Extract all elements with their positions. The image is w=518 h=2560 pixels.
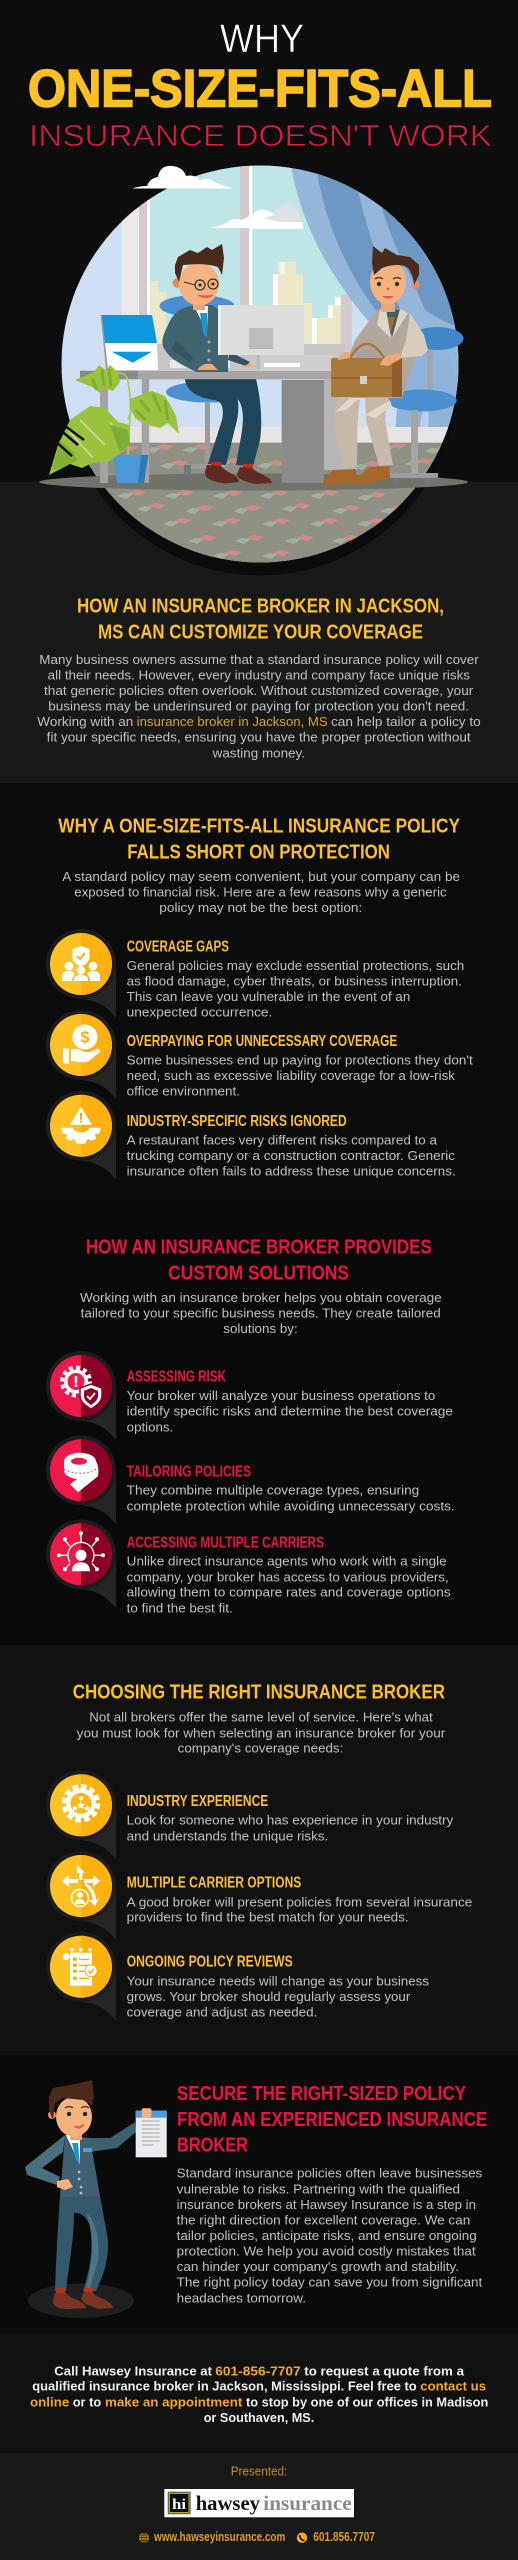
item: tailoring policies: TAILORING POLICIES (127, 1463, 251, 1480)
heading (177, 2082, 487, 2157)
call to action (30, 2363, 488, 2425)
intro paragraph: policy may not be the best option: (159, 900, 362, 915)
icon: gear with stars (46, 1770, 116, 1859)
icon: agent network (46, 1519, 116, 1608)
item: multiple carrier options: providers to find the best match for your needs. (127, 1910, 409, 1925)
call to action: online (30, 2394, 69, 2409)
intro paragraph (62, 869, 460, 915)
clouds in window (210, 216, 250, 228)
panel: secure the right-sized policy (25, 2080, 487, 2318)
item: coverage gaps: unexpected occurrence. (127, 1005, 272, 1020)
paragraph: tailor policies, anticipate risks, and ensure ongoing (177, 2228, 477, 2243)
intro paragraph (80, 1290, 442, 1336)
call to action: or Southaven, MS. (204, 2410, 314, 2425)
monitor (218, 305, 304, 370)
icon: direction arrows and person (46, 1851, 116, 1940)
title (28, 17, 492, 153)
carpet tiles (110, 443, 454, 559)
heading: HOW AN INSURANCE BROKER IN JACKSON, (77, 595, 444, 618)
presented label: Presented: (231, 2463, 287, 2478)
heading: FALLS SHORT ON PROTECTION (127, 840, 390, 863)
paragraph: headaches tomorrow. (177, 2290, 306, 2305)
panel: choosing the right broker (46, 1680, 472, 2021)
heading: MS CAN CUSTOMIZE YOUR COVERAGE (98, 621, 423, 644)
intro paragraph: Not all brokers offer the same level of service. Here's what (89, 1710, 433, 1725)
item: assessing risk (127, 1369, 453, 1434)
phone number: 601.856.7707 (313, 2529, 375, 2544)
intro paragraph (37, 652, 481, 760)
item: accessing multiple carriers: Unlike direct insurance agents who work with a single (127, 1554, 447, 1569)
office scene (62, 166, 458, 562)
heading (58, 814, 460, 863)
paragraph: insurance brokers at Hawsey Insurance is a step in (177, 2197, 476, 2212)
item: accessing multiple carriers: ACCESSING MULTIPLE CARRIERS (127, 1534, 324, 1551)
title: INSURANCE DOESN'T WORK (29, 118, 492, 153)
item: industry experience: Look for someone who has experience in your industry (127, 1813, 454, 1828)
panel: how a broker provides custom solutions (46, 1235, 455, 1615)
item: ongoing policy reviews: coverage and adjust as needed. (127, 2005, 317, 2020)
heading (86, 1235, 432, 1284)
intro paragraph: business may be underinsured or paying for protection you don't need. (48, 698, 469, 713)
icon: hand holding coin (46, 1010, 116, 1099)
paragraph: The right policy today can save you from significant (177, 2275, 483, 2290)
item: industry-specific risks: INDUSTRY-SPECIFIC RISKS IGNORED (127, 1113, 347, 1130)
icon: globe (139, 2533, 149, 2543)
call to action: qualified insurance broker in Jackson, Mississippi. Feel free to (32, 2379, 417, 2394)
item: ongoing policy reviews: Your insurance needs will change as your business (127, 1973, 430, 1988)
item: accessing multiple carriers (127, 1534, 451, 1615)
right man: client with briefcase (323, 246, 428, 485)
item: industry experience: INDUSTRY EXPERIENCE (127, 1793, 268, 1810)
intro paragraph: can help tailor a policy to (331, 714, 481, 729)
curtain (292, 168, 458, 434)
heading: BROKER (177, 2134, 248, 2157)
item: overpaying (127, 1033, 473, 1099)
panel: why one-size-fits-all falls short (46, 814, 473, 1180)
title: WHY (220, 17, 304, 61)
intro paragraph: Working with an insurance broker helps you obtain coverage (80, 1290, 442, 1305)
logo: hawsey insurance: insurance (263, 2491, 352, 2515)
item: coverage gaps (127, 939, 464, 1020)
paragraph (177, 2166, 483, 2305)
item: coverage gaps: COVERAGE GAPS (127, 939, 229, 956)
heading (77, 595, 444, 644)
potted plant (49, 365, 179, 483)
item: tailoring policies: They combine multiple coverage types, ensuring (127, 1483, 419, 1498)
item: assessing risk: ASSESSING RISK (127, 1369, 226, 1386)
call to action: make an appointment (105, 2394, 243, 2409)
intro paragraph: insurance broker in Jackson, MS (137, 714, 328, 729)
item: coverage gaps: This can leave you vulnerable in the event of an (127, 989, 410, 1004)
circle drop shadow (62, 178, 458, 576)
title: ONE-SIZE-FITS-ALL (28, 59, 492, 118)
item: assessing risk: identify specific risks and determine the best coverage (127, 1404, 453, 1419)
item: coverage gaps: General policies may exclude essential protections, such (127, 958, 464, 973)
heading: CUSTOM SOLUTIONS (168, 1261, 349, 1284)
right chair (387, 327, 464, 484)
binder on desk (101, 315, 158, 370)
logo: hawsey insurance: hi (172, 2497, 186, 2513)
cloud above circle (132, 166, 233, 188)
paragraph: vulnerable to risks. Partnering with the qualified (177, 2181, 460, 2196)
icon: warning and gear (46, 1091, 116, 1180)
item: industry-specific risks: insurance often fails to address these unique concerns. (127, 1164, 456, 1179)
floor and skirting (130, 427, 448, 443)
icon: measuring tape (46, 1435, 116, 1524)
call to action: to stop by one of our offices in Madison (246, 2394, 488, 2409)
item: accessing multiple carriers: allowing them to compare rates and coverage options (127, 1585, 451, 1600)
left chair (160, 295, 250, 475)
heading: SECURE THE RIGHT-SIZED POLICY (177, 2082, 466, 2105)
icon: phone (297, 2532, 307, 2543)
item: ongoing policy reviews: ONGOING POLICY REVIEWS (127, 1954, 293, 1971)
heading: CHOOSING THE RIGHT INSURANCE BROKER (73, 1680, 445, 1703)
item: industry-specific risks: trucking company or a construction contractor. Generic (127, 1148, 456, 1163)
heading: HOW AN INSURANCE BROKER PROVIDES (86, 1235, 432, 1258)
website: www.hawseyinsurance.com (153, 2529, 285, 2544)
icon: shield and people (46, 929, 116, 1018)
item: overpaying: need, such as excessive liability coverage for a low-risk (127, 1068, 456, 1083)
hero illustration: broker and client at a desk (39, 160, 470, 580)
item: industry experience: and understands the unique risks. (127, 1828, 328, 1843)
intro paragraph: Working with an (37, 714, 133, 729)
item: tailoring policies (127, 1463, 455, 1513)
intro paragraph: A standard policy may seem convenient, but your company can be (62, 869, 460, 884)
paragraph: the right direction for excellent coverage. We can (177, 2213, 470, 2228)
call to action: 601-856-7707 (215, 2363, 301, 2378)
item: coverage gaps: as flood damage, cyber threats, or business interruption. (127, 973, 462, 988)
desk (80, 344, 357, 483)
intro paragraph: company's coverage needs: (178, 1741, 343, 1756)
left man: legs and shoes (185, 379, 272, 484)
item: overpaying: OVERPAYING FOR UNNECESSARY COVERAGE (127, 1033, 397, 1050)
intro paragraph: fit your specific needs, ensuring you have the proper protection without (47, 730, 471, 745)
panel: how a broker can customize coverage (37, 595, 481, 760)
icon: gear alert and shield (46, 1351, 116, 1440)
item: overpaying: Some businesses end up paying for protections they don't (127, 1053, 473, 1068)
call to action: Call Hawsey Insurance at (54, 2363, 213, 2378)
intro paragraph: Many business owners assume that a standard insurance policy will cover (39, 652, 479, 667)
item: overpaying: office environment. (127, 1084, 240, 1099)
item: accessing multiple carriers: to find the best fit. (127, 1600, 233, 1615)
intro paragraph: you must look for when selecting an insurance broker for your (77, 1725, 446, 1740)
call to action: or to (73, 2394, 101, 2409)
paragraph: can hinder your company's growth and stability. (177, 2259, 459, 2274)
logo: hawsey insurance: hawsey (196, 2491, 260, 2515)
floor shadow ellipse (39, 474, 468, 490)
item: assessing risk: options. (127, 1419, 173, 1434)
icon: hand holding coin: $ (81, 1030, 90, 1046)
item: tailoring policies: complete protection while avoiding unnecessary costs. (127, 1498, 455, 1513)
item: assessing risk: Your broker will analyze your business operations to (127, 1388, 435, 1403)
item: multiple carrier options: MULTIPLE CARRIER OPTIONS (127, 1875, 301, 1892)
item: ongoing policy reviews (127, 1954, 430, 2020)
intro paragraph (77, 1710, 446, 1756)
paragraph: Standard insurance policies often leave businesses (177, 2166, 483, 2181)
item: industry-specific risks: A restaurant faces very different risks compared to a (127, 1133, 438, 1148)
intro paragraph: wasting money. (212, 745, 305, 760)
intro paragraph: exposed to financial risk. Here are a few reasons why a generic (74, 884, 447, 899)
intro paragraph: all their needs. However, every industry and company face unique risks (48, 667, 471, 682)
intro paragraph: tailored to your specific business needs. They create tailored (81, 1305, 441, 1320)
item: industry experience (127, 1793, 454, 1843)
intro paragraph: solutions by: (223, 1321, 298, 1336)
item: multiple carrier options: A good broker will present policies from several insurance (127, 1894, 472, 1909)
icon: review checklist (46, 1932, 116, 2021)
illustration: broker holding a document (25, 2080, 167, 2318)
paragraph: protection. We help you avoid costly mistakes that (177, 2244, 476, 2259)
footer (139, 2463, 375, 2544)
item: industry-specific risks (127, 1113, 456, 1179)
intro paragraph: that generic policies often overlook. Without customized coverage, your (44, 683, 474, 698)
logo: hawsey insurance (164, 2489, 354, 2517)
item: accessing multiple carriers: company, your broker has access to various providers, (127, 1569, 449, 1584)
item: ongoing policy reviews: grows. Your broker should regularly assess your (127, 1989, 411, 2004)
call to action: to request a quote from a (304, 2363, 465, 2378)
call to action: contact us (420, 2379, 486, 2394)
left man: torso and head (162, 244, 257, 372)
item: multiple carrier options (127, 1875, 472, 1925)
